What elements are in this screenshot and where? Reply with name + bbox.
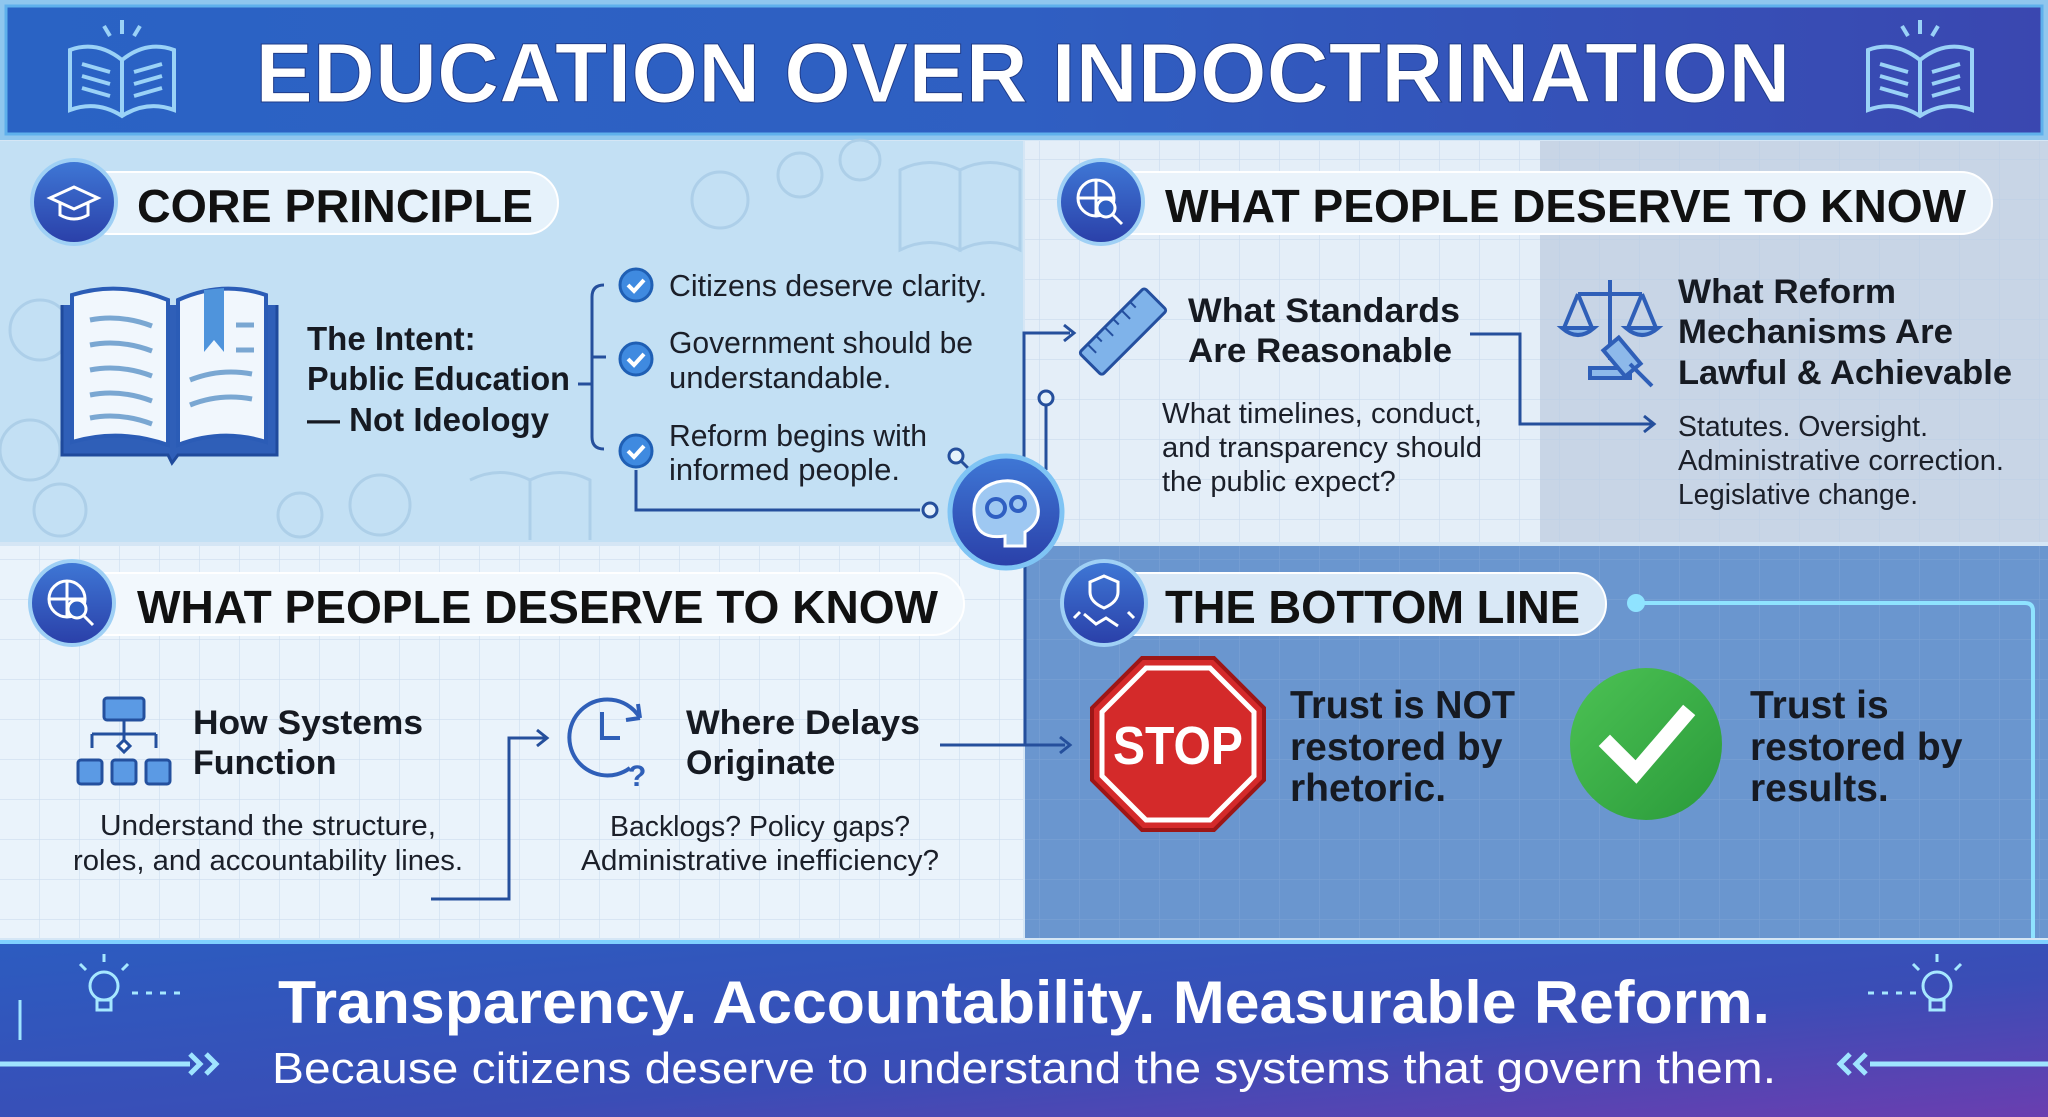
text: trust is restored: results. xyxy=(1750,767,1889,810)
text: what standards are reasonable: What timelines, conduct, xyxy=(1162,398,1482,430)
text: what reform mechanisms: Administrative correction. xyxy=(1678,445,2004,477)
checklist: Reform begins with xyxy=(669,418,927,453)
text: what standards are reasonable: What Standards xyxy=(1188,292,1460,330)
text: what standards are reasonable: the public expect? xyxy=(1162,466,1396,498)
heading: what people deserve to know xyxy=(1059,160,1992,244)
icon: chevrons right xyxy=(1840,1054,2048,1074)
panel: core principle xyxy=(0,140,1023,542)
icon: bulb right xyxy=(1868,954,1961,1010)
text: trust is not restored xyxy=(1290,684,1515,810)
text: what reform mechanisms: Lawful & Achievable xyxy=(1678,354,2012,392)
heading: what people deserve to know 2 xyxy=(30,561,964,645)
text: trust is restored: Trust is xyxy=(1750,684,1889,727)
text: how systems function: roles, and accountability lines. xyxy=(73,845,463,877)
panel: what people deserve to know (top right) xyxy=(1025,141,2048,542)
text: where delays originate: Administrative inefficiency? xyxy=(581,845,939,877)
icon: bulb left xyxy=(80,954,180,1010)
text: what reform mechanisms: Mechanisms Are xyxy=(1678,313,1953,351)
footer xyxy=(0,940,2048,1117)
checklist: Citizens deserve clarity. xyxy=(669,268,987,303)
text: where delays originate: Where Delays xyxy=(686,704,920,742)
footer headline: Transparency. Accountability. Measurable Reform. xyxy=(278,969,1770,1036)
text: how systems function: How Systems xyxy=(193,704,423,742)
heading: the bottom line xyxy=(1062,561,1606,645)
icon: stop sign: STOP xyxy=(1113,716,1243,776)
text: where delays originate: Originate xyxy=(686,744,835,782)
panel: what people deserve to know (bottom left) xyxy=(0,546,1023,938)
arrow: standards to mechanisms xyxy=(1470,334,1654,432)
icon: stop sign xyxy=(1092,658,1264,830)
heading: what people deserve to know: WHAT PEOPLE DESERVE TO KNOW xyxy=(1165,180,1967,232)
icon: open book xyxy=(62,288,277,463)
icon: scales and gavel xyxy=(1562,280,1658,386)
brain hub xyxy=(949,325,1074,568)
heading: what people deserve to know 2: WHAT PEOPLE DESERVE TO KNOW xyxy=(137,581,939,633)
text: trust is restored: restored by xyxy=(1750,726,1963,769)
text: trust is not restored: restored by xyxy=(1290,726,1503,769)
text: what reform mechanisms xyxy=(1678,273,2012,511)
footer subtitle: Because citizens deserve to understand the systems that govern them. xyxy=(272,1044,1776,1093)
bracket connector xyxy=(578,285,937,517)
arrow: systems to delays xyxy=(431,730,547,899)
text: what standards are reasonable xyxy=(1162,292,1482,498)
icon: clock: ? xyxy=(628,760,646,793)
text: trust is restored xyxy=(1750,684,1963,810)
text: what standards are reasonable: Are Reasonable xyxy=(1188,332,1452,370)
text: the intent xyxy=(307,320,570,438)
checklist: understandable. xyxy=(669,360,891,395)
title: EDUCATION OVER INDOCTRINATION xyxy=(256,26,1791,120)
text: trust is not restored: rhetoric. xyxy=(1290,767,1446,810)
checklist: informed people. xyxy=(669,452,900,487)
panel: the bottom line xyxy=(940,520,2048,938)
text: what standards are reasonable: and transparency should xyxy=(1162,432,1482,464)
text: how systems function xyxy=(73,704,463,877)
icon: clock xyxy=(569,699,646,793)
heading: core principle: CORE PRINCIPLE xyxy=(137,180,533,232)
icon: hierarchy xyxy=(78,698,170,784)
title bar xyxy=(0,0,2048,140)
icon: book left xyxy=(70,20,174,116)
text: the intent: The Intent: xyxy=(307,320,476,357)
heading: the bottom line: THE BOTTOM LINE xyxy=(1165,581,1580,633)
icon: green check xyxy=(1570,668,1722,820)
text: the intent: Public Education xyxy=(307,360,570,397)
text: the intent: — Not Ideology xyxy=(307,401,550,438)
text: trust is not restored: Trust is NOT xyxy=(1290,684,1515,727)
text: how systems function: Understand the structure, xyxy=(100,810,436,842)
text: where delays originate xyxy=(581,704,939,877)
text: where delays originate: Backlogs? Policy gaps? xyxy=(610,811,910,843)
connector line xyxy=(1629,596,2033,938)
arrow: delays to bottom line xyxy=(940,520,1070,753)
icon: ruler xyxy=(1079,288,1167,375)
heading: core principle xyxy=(32,160,558,244)
text: what reform mechanisms: What Reform xyxy=(1678,273,1896,311)
checklist xyxy=(620,268,987,487)
icon: chevrons left xyxy=(0,1000,216,1074)
text: what reform mechanisms: Legislative change. xyxy=(1678,479,1918,511)
text: what reform mechanisms: Statutes. Oversight. xyxy=(1678,411,1928,443)
text: how systems function: Function xyxy=(193,744,337,782)
checklist: Government should be xyxy=(669,325,973,360)
icon: book right xyxy=(1868,20,1972,116)
